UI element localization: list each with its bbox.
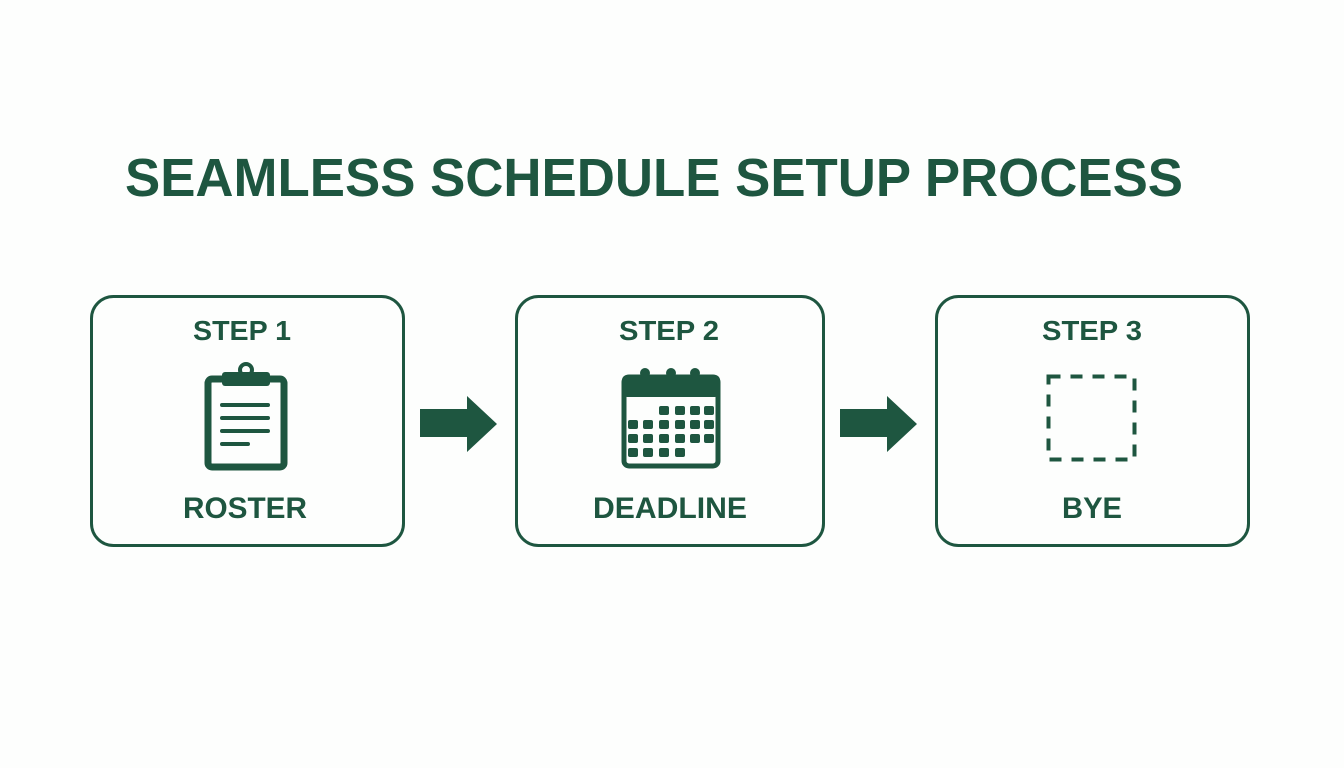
arrow 2 [840, 396, 917, 452]
icon: calendar [622, 368, 720, 466]
step 1 heading: STEP 1 [193, 315, 291, 346]
icon: clipboard [208, 364, 284, 467]
title: SEAMLESS SCHEDULE SETUP PROCESS [125, 148, 1183, 208]
panel: step 2 [516, 296, 824, 546]
arrow 1 [420, 396, 497, 452]
panel: step 1 [92, 296, 404, 546]
panel: step 3 [936, 296, 1248, 546]
step 1 label: ROSTER [183, 492, 307, 525]
icon: dashed square [1048, 376, 1134, 460]
step 3 label: BYE [1062, 492, 1122, 525]
step 2 heading: STEP 2 [619, 315, 719, 346]
step 3 heading: STEP 3 [1042, 315, 1142, 346]
step 2 label: DEADLINE [593, 492, 747, 525]
